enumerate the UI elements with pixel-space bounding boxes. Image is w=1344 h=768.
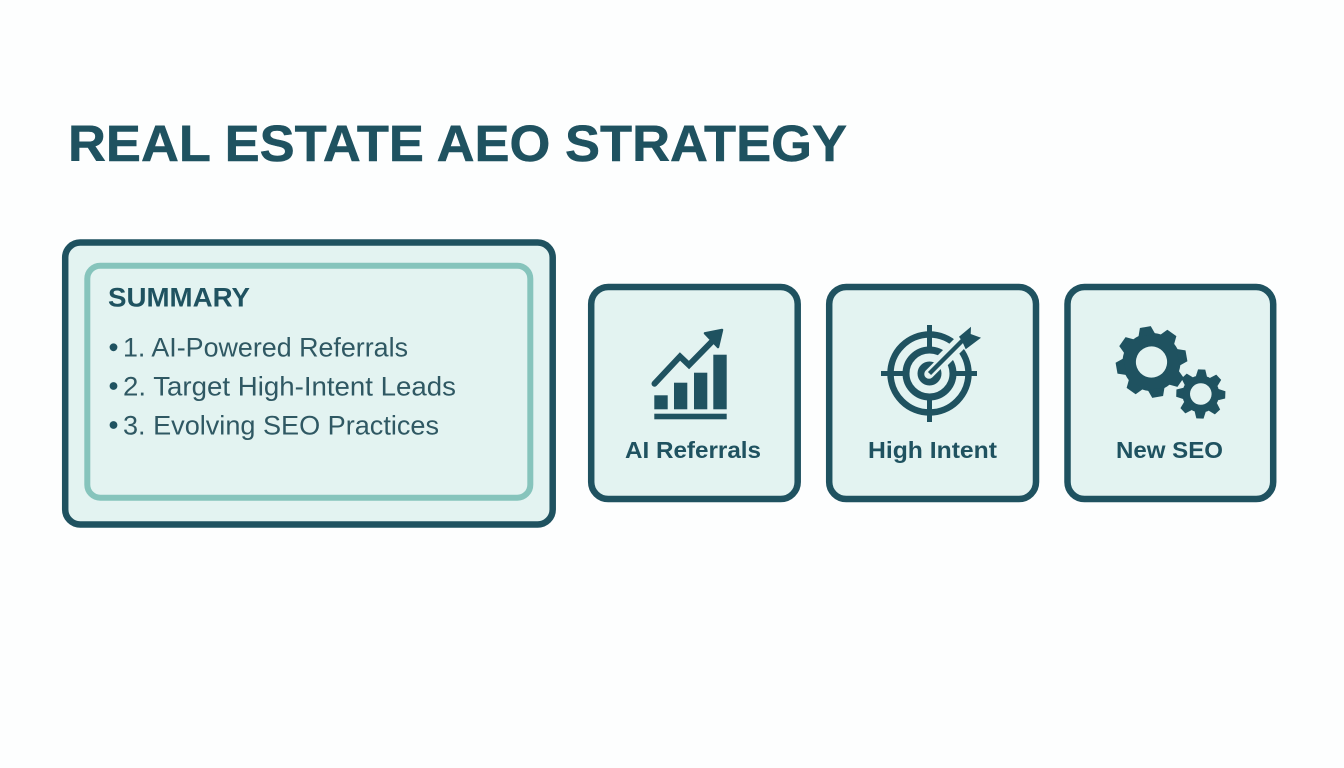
summary inner frame [87, 266, 530, 498]
icon: gears [1110, 321, 1226, 419]
card: New SEO [1068, 287, 1273, 499]
icon: rising bar chart with arrow [654, 330, 727, 419]
title: REAL ESTATE AEO STRATEGY [68, 115, 847, 172]
summary heading: SUMMARY [108, 282, 250, 312]
card: AI Referrals [591, 287, 798, 499]
label: High Intent [868, 437, 997, 463]
label: AI Referrals [625, 437, 761, 463]
panel: summary [65, 242, 553, 524]
card: High Intent [829, 287, 1036, 499]
summary list: 1. AI-Powered Referrals [123, 332, 408, 362]
summary list: 3. Evolving SEO Practices [123, 410, 439, 440]
icon: target with arrow [881, 325, 981, 422]
summary list: 2. Target High-Intent Leads [123, 372, 456, 402]
label: New SEO [1116, 437, 1223, 463]
summary outer frame [65, 242, 553, 524]
summary list [110, 332, 456, 440]
